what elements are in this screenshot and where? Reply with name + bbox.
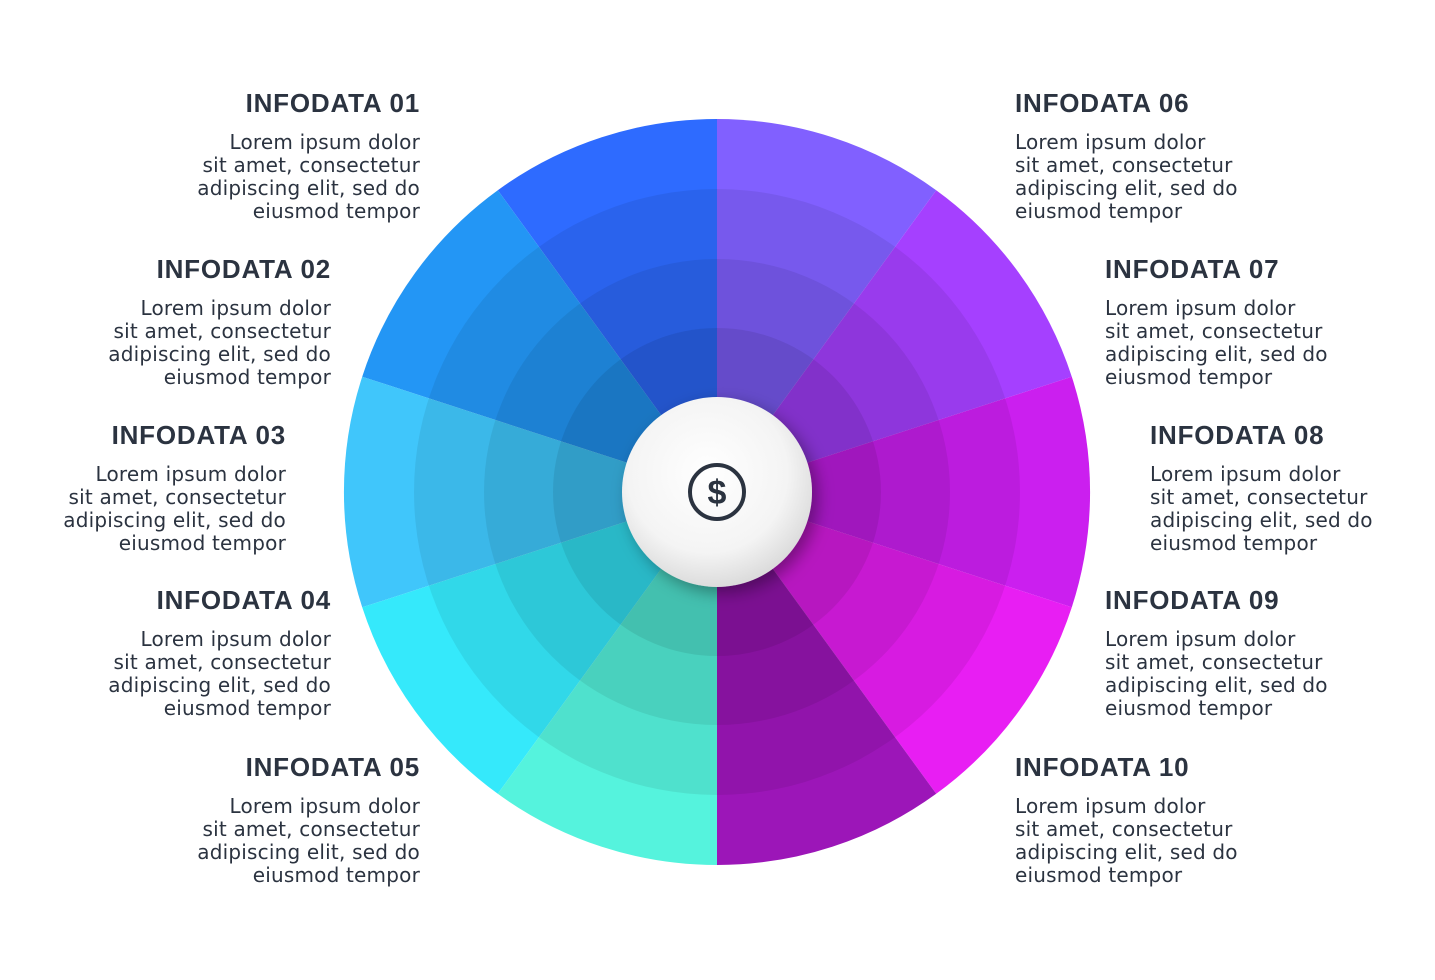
text: infodata 04 xyxy=(108,585,331,720)
segment 08 xyxy=(717,377,1090,607)
text: infodata 02: adipiscing elit, sed do xyxy=(108,342,331,366)
segment 01 xyxy=(498,119,717,492)
text: infodata 05: sit amet, consectetur xyxy=(202,817,420,841)
text: infodata 06: eiusmod tempor xyxy=(1015,199,1182,223)
text: infodata 03 xyxy=(63,420,286,555)
text: infodata 10: adipiscing elit, sed do xyxy=(1015,840,1238,864)
text: infodata 08: Lorem ipsum dolor xyxy=(1150,462,1340,486)
text: infodata 09: INFODATA 09 xyxy=(1105,585,1279,615)
text: infodata 04: sit amet, consectetur xyxy=(114,650,331,674)
text: infodata 03: INFODATA 03 xyxy=(112,420,286,450)
center hub xyxy=(622,397,812,587)
text: infodata 07: adipiscing elit, sed do xyxy=(1105,342,1328,366)
icon: dollar: $ xyxy=(708,474,727,512)
segment 10 xyxy=(717,492,936,865)
text: infodata 06: Lorem ipsum dolor xyxy=(1015,130,1206,154)
text: infodata 04: eiusmod tempor xyxy=(164,696,331,720)
text: infodata 06: INFODATA 06 xyxy=(1015,88,1189,118)
text: infodata 09: eiusmod tempor xyxy=(1105,696,1272,720)
text: infodata 05: adipiscing elit, sed do xyxy=(197,840,420,864)
text: infodata 03: Lorem ipsum dolor xyxy=(96,462,286,486)
text: infodata 09: adipiscing elit, sed do xyxy=(1105,673,1328,697)
text: infodata 10: eiusmod tempor xyxy=(1015,863,1182,887)
text: infodata 08 xyxy=(1150,420,1373,555)
text: infodata 02: INFODATA 02 xyxy=(157,254,331,284)
segment 07 xyxy=(717,190,1072,492)
text: infodata 06 xyxy=(1015,88,1238,223)
text: infodata 01: sit amet, consectetur xyxy=(202,153,420,177)
text: infodata 09: sit amet, consectetur xyxy=(1105,650,1322,674)
segment 09 xyxy=(717,492,1072,794)
text: infodata 05: INFODATA 05 xyxy=(246,752,420,782)
text: infodata 01: INFODATA 01 xyxy=(246,88,420,118)
text: infodata 04: INFODATA 04 xyxy=(157,585,331,615)
text: infodata 10: sit amet, consectetur xyxy=(1015,817,1232,841)
text: infodata 02: eiusmod tempor xyxy=(164,365,331,389)
text: infodata 08: adipiscing elit, sed do xyxy=(1150,508,1373,532)
segment 05 xyxy=(498,492,717,865)
text: infodata 10: INFODATA 10 xyxy=(1015,752,1189,782)
text: infodata 07: Lorem ipsum dolor xyxy=(1105,296,1296,320)
text: infodata 07: INFODATA 07 xyxy=(1105,254,1279,284)
text: infodata 02: sit amet, consectetur xyxy=(114,319,331,343)
text: infodata 08: INFODATA 08 xyxy=(1150,420,1324,450)
segment 04 xyxy=(362,492,717,794)
text: infodata 03: adipiscing elit, sed do xyxy=(63,508,286,532)
segment 03 xyxy=(344,377,717,607)
text: infodata 06: adipiscing elit, sed do xyxy=(1015,176,1238,200)
text: infodata 03: eiusmod tempor xyxy=(119,531,286,555)
icon: dollar xyxy=(690,465,744,519)
text: infodata 02 xyxy=(108,254,331,389)
text: infodata 08: eiusmod tempor xyxy=(1150,531,1317,555)
text: infodata 07 xyxy=(1105,254,1328,389)
text: infodata 01: adipiscing elit, sed do xyxy=(197,176,420,200)
text: infodata 05: Lorem ipsum dolor xyxy=(230,794,420,818)
text: infodata 02: Lorem ipsum dolor xyxy=(140,296,331,320)
text: infodata 08: sit amet, consectetur xyxy=(1150,485,1368,509)
text: infodata 05: eiusmod tempor xyxy=(253,863,420,887)
text: infodata 04: Lorem ipsum dolor xyxy=(140,627,331,651)
text: infodata 01: eiusmod tempor xyxy=(253,199,420,223)
text: infodata 09 xyxy=(1105,585,1328,720)
text: infodata 09: Lorem ipsum dolor xyxy=(1105,627,1296,651)
segment 06 xyxy=(717,119,936,492)
segment 02 xyxy=(362,190,717,492)
text: infodata 03: sit amet, consectetur xyxy=(68,485,286,509)
text: infodata 07: eiusmod tempor xyxy=(1105,365,1272,389)
text: infodata 07: sit amet, consectetur xyxy=(1105,319,1322,343)
text: infodata 01: Lorem ipsum dolor xyxy=(230,130,420,154)
text: infodata 10 xyxy=(1015,752,1238,887)
text: infodata 05 xyxy=(197,752,420,887)
text: infodata 06: sit amet, consectetur xyxy=(1015,153,1232,177)
text: infodata 10: Lorem ipsum dolor xyxy=(1015,794,1206,818)
text: infodata 04: adipiscing elit, sed do xyxy=(108,673,331,697)
text: infodata 01 xyxy=(197,88,420,223)
